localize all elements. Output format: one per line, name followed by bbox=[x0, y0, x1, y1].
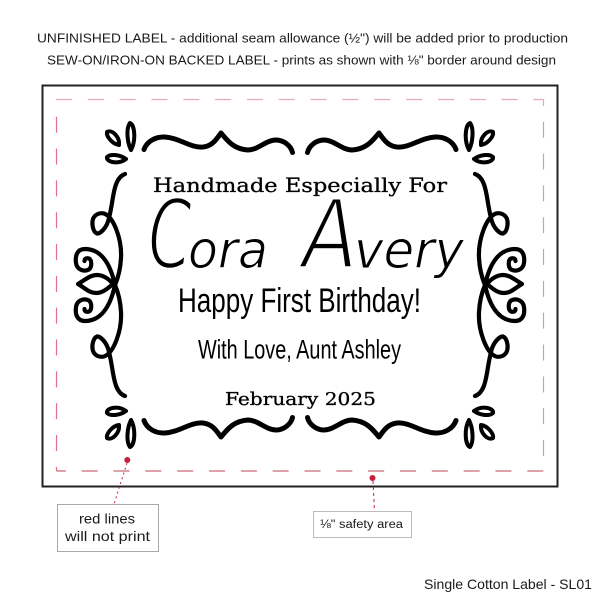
ornament: right side flourish bbox=[475, 174, 524, 396]
heading: unfinished label note: UNFINISHED LABEL - additional seam allowance (½") will be added prior to production bbox=[37, 30, 568, 46]
callout: red lines will not print: will not print bbox=[64, 528, 150, 544]
text: recipient name: C bbox=[148, 179, 192, 291]
ornament: bottom-left corner bbox=[107, 408, 292, 447]
ornament: top-left corner bbox=[107, 123, 292, 162]
text: recipient name: ora bbox=[188, 221, 268, 281]
ornament: left side flourish bbox=[76, 174, 125, 396]
callout: red lines will not print: red lines bbox=[79, 510, 135, 526]
callout: safety area: ⅛" safety area bbox=[320, 519, 404, 531]
ornament: bottom-right corner bbox=[308, 408, 493, 447]
text: recipient name: very bbox=[354, 221, 465, 281]
text: handmade especially for: Handmade Especially For bbox=[153, 173, 447, 197]
safety area dashed guide bbox=[56, 100, 544, 471]
text: sender: With Love, Aunt Ashley bbox=[198, 334, 401, 364]
text: recipient name: A bbox=[297, 179, 358, 291]
ornament: top-right corner bbox=[308, 123, 493, 162]
caption: product name: Single Cotton Label - SL01 bbox=[424, 576, 592, 592]
text: occasion: Happy First Birthday! bbox=[178, 282, 421, 320]
callout: red lines will not print bbox=[58, 457, 158, 552]
text: recipient name bbox=[148, 179, 465, 291]
text: date: February 2025 bbox=[225, 389, 376, 410]
heading: backed label note: SEW-ON/IRON-ON BACKED LABEL - prints as shown with ⅛" border around design bbox=[47, 52, 556, 68]
panel: label outline bbox=[42, 86, 558, 486]
callout: safety area bbox=[314, 475, 412, 538]
